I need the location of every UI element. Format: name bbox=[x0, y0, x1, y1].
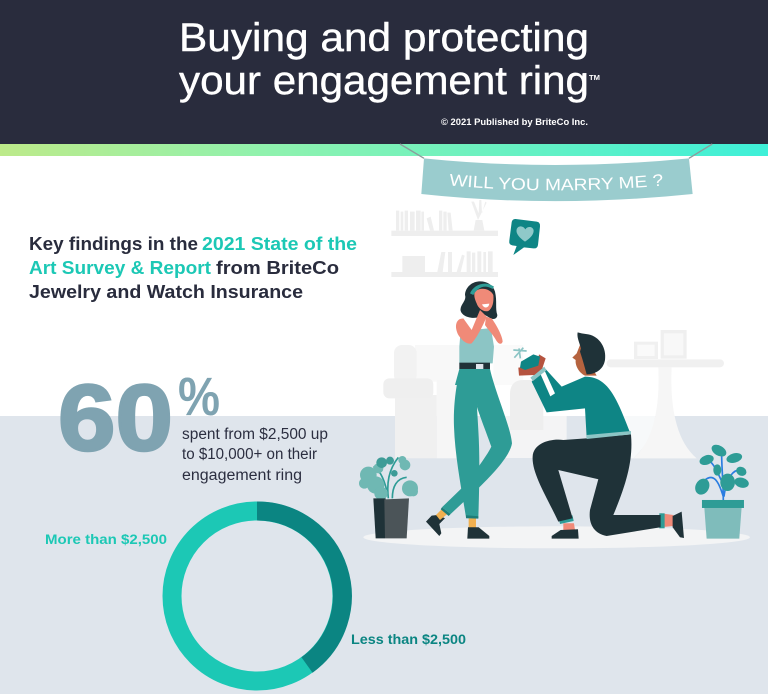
gradient strip bbox=[0, 144, 768, 156]
plant: left bbox=[359, 456, 418, 538]
floor ellipse bbox=[363, 526, 750, 548]
man: legs and shoes bbox=[533, 434, 684, 539]
stat description bbox=[182, 426, 328, 484]
header band bbox=[0, 0, 768, 144]
60 percent figure: % bbox=[178, 367, 220, 427]
key findings text: 2021 State of the bbox=[202, 233, 357, 254]
60 percent figure bbox=[58, 365, 220, 470]
man: upper body bbox=[513, 332, 631, 439]
stat description: to $10,000+ on their bbox=[182, 446, 317, 463]
stat description: engagement ring bbox=[182, 467, 302, 484]
stat description: spent from $2,500 up bbox=[182, 426, 328, 443]
title bbox=[179, 16, 600, 103]
key findings text: Art Survey & Report bbox=[29, 257, 211, 278]
sofa bbox=[383, 345, 567, 458]
shelves bbox=[391, 200, 498, 277]
side table bbox=[607, 330, 724, 458]
key findings text: Jewelry and Watch Insurance bbox=[29, 281, 303, 302]
donut chart bbox=[172, 511, 342, 681]
title: TM bbox=[589, 75, 600, 82]
plant: right bbox=[692, 442, 750, 539]
60 percent figure: 60 bbox=[58, 365, 173, 470]
woman: upper body bbox=[455, 281, 503, 385]
banner: will you marry me bbox=[392, 144, 712, 277]
key findings text bbox=[29, 233, 357, 302]
key findings text: Key findings in the bbox=[29, 233, 198, 254]
icon: heart speech bubble bbox=[509, 219, 540, 255]
title: Buying and protecting bbox=[179, 16, 589, 60]
copyright line: © 2021 Published by BriteCo Inc. bbox=[441, 117, 588, 128]
key findings text: from BriteCo bbox=[216, 257, 339, 278]
label: more than: More than $2,500 bbox=[45, 531, 167, 547]
woman: legs and shoes bbox=[426, 369, 512, 539]
title: your engagement ring bbox=[179, 59, 589, 103]
banner: will you marry me: WILL YOU MARRY ME ? bbox=[450, 174, 662, 190]
illustration: proposal scene bbox=[359, 281, 750, 548]
label: less than: Less than $2,500 bbox=[351, 631, 466, 647]
